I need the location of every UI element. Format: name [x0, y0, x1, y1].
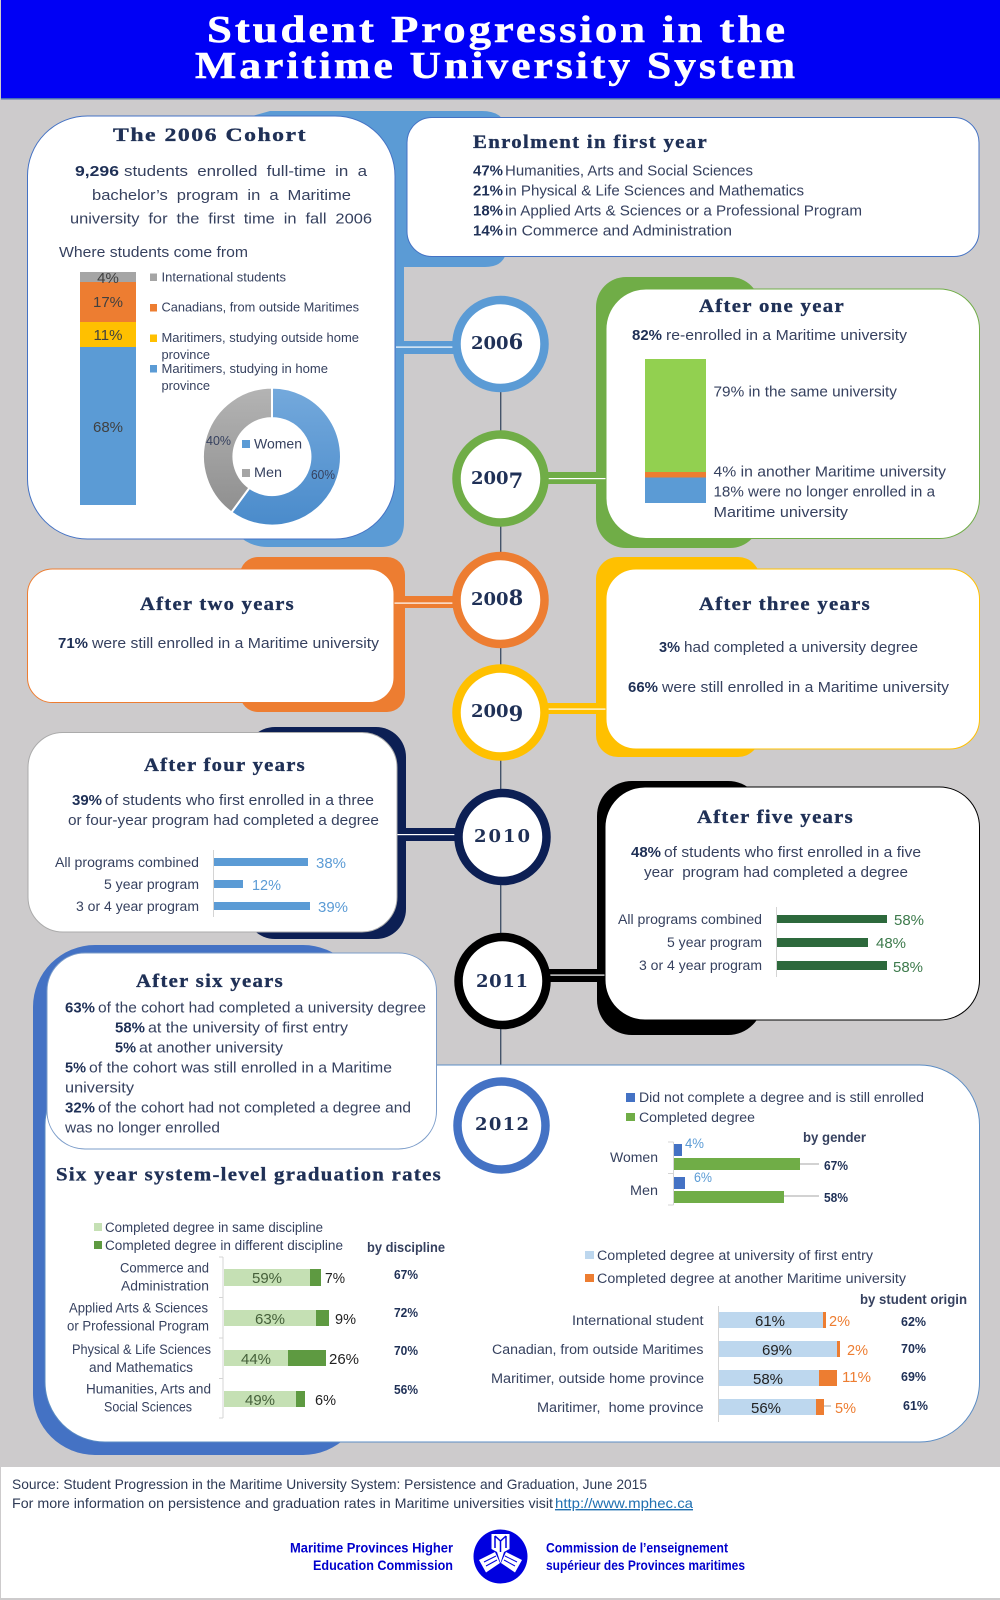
legend: origin: province — [162, 347, 210, 362]
legend: origin: Maritimers, studying outside home — [162, 330, 359, 345]
text block: enrolment list: 14% — [473, 222, 503, 240]
chart: by student origin: Maritimer, outside home province — [491, 1371, 704, 1386]
chart: by discipline: or Professional Program — [67, 1319, 209, 1334]
chart: by student origin: 5% — [835, 1400, 856, 1417]
donut chart: gender: 60% — [311, 467, 335, 482]
chart: by discipline: 7% — [325, 1270, 345, 1287]
chart: by student origin: Completed degree at university of first entry — [597, 1248, 873, 1263]
chart: by discipline — [67, 1220, 445, 1418]
chart: by student origin: International student — [572, 1313, 704, 1328]
bar chart: four year rates: 39% — [318, 899, 348, 916]
text block: enrolment list: in Commerce and Administration — [505, 222, 732, 240]
timeline node: 2007: 200 — [471, 468, 509, 489]
text: re-enrolled: re-enrolled in a Maritime university — [666, 327, 908, 344]
bar chart: five year rates: All programs combined — [618, 912, 762, 927]
organisation name: French — [546, 1541, 745, 1573]
text block: six year results: was no longer enrolled — [64, 1120, 220, 1137]
text: bar labels: 18% were no longer enrolled in a — [714, 484, 936, 500]
timeline node: 2006 — [456, 300, 544, 388]
organisation name: French: Commission de l’enseignement — [546, 1541, 728, 1556]
chart: by gender: Did not complete a degree and is still enrolled — [639, 1090, 924, 1105]
text block: cohort description: students enrolled full-time in a — [124, 163, 368, 180]
chart: by discipline: 44% — [241, 1351, 271, 1368]
timeline node: 2012 — [458, 1082, 546, 1170]
timeline node: 2009: 200 — [471, 701, 509, 722]
bar chart: five year rates: 48% — [876, 935, 906, 952]
source text — [12, 1476, 693, 1511]
bar chart: four year rates: All programs combined — [55, 855, 199, 870]
heading: after one year: After one year — [699, 296, 845, 317]
icon: commission logo — [474, 1530, 528, 1584]
text block: six year results: at the university of first entry — [148, 1020, 349, 1037]
chart: by gender: Men — [630, 1183, 658, 1198]
timeline node: 2010: 2010 — [474, 826, 530, 847]
text: four year result — [68, 792, 379, 829]
stacked bar chart: origin: 11% — [94, 327, 122, 344]
panel: after five years — [543, 781, 980, 1035]
text: bar labels: 4% in another Maritime university — [714, 464, 947, 480]
text: four year result: or four-year program had completed a degree — [68, 812, 379, 829]
source text: http://www.mphec.ca — [555, 1495, 693, 1511]
chart: by discipline: Completed degree in same discipline — [105, 1220, 323, 1235]
chart: by discipline: 9% — [335, 1311, 356, 1328]
timeline node: 2011 — [458, 937, 546, 1025]
text: five year result: year program had completed a degree — [644, 864, 908, 881]
donut chart: gender: 40% — [206, 433, 231, 448]
connector: 2011 — [543, 969, 605, 982]
panel: after one year — [540, 277, 980, 548]
timeline node: 2009: 9 — [509, 701, 523, 726]
chart: by student origin: 11% — [842, 1369, 871, 1386]
timeline node: 2007: 7 — [509, 468, 523, 493]
chart: by discipline: Physical & Life Sciences — [72, 1342, 211, 1357]
text: three year results: had completed a university degree — [684, 639, 918, 656]
connector: 2006 — [396, 341, 462, 354]
text block: six year results: at another university — [139, 1040, 284, 1057]
chart: by discipline: 59% — [252, 1270, 282, 1287]
text block: six year results: 5% — [115, 1040, 136, 1057]
connector: 2009 — [540, 703, 606, 714]
chart: by discipline: 26% — [329, 1351, 359, 1368]
heading: six year graduation rates: Six year system-level graduation rates — [56, 1165, 442, 1186]
text: five year result: of students who first enrolled in a five — [664, 844, 921, 861]
chart: by discipline: 6% — [315, 1392, 336, 1409]
chart: by gender: 6% — [694, 1170, 712, 1185]
chart: by discipline: Humanities, Arts and — [86, 1381, 211, 1396]
bar chart: five year rates: 3 or 4 year program — [639, 958, 762, 973]
bar chart: four year rates — [55, 850, 348, 917]
subheading: where students come from: Where students come from — [59, 244, 248, 261]
chart: by student origin: Canadian, from outside Maritimes — [492, 1342, 704, 1357]
chart: by discipline: Completed degree in different discipline — [105, 1238, 343, 1253]
chart: by discipline: 49% — [245, 1392, 275, 1409]
text: bar labels: 79% in the same university — [714, 384, 897, 400]
timeline node: 2009 — [456, 668, 544, 756]
text: five year result — [631, 844, 921, 881]
chart: by gender — [610, 1090, 924, 1205]
chart: by gender: 67% — [824, 1158, 848, 1173]
text block: enrolment list: 47% — [473, 162, 503, 180]
footer — [1, 1467, 1000, 1598]
text: two year result: 71% — [58, 635, 88, 652]
chart: by gender: Completed degree — [639, 1110, 755, 1125]
panel: after three years — [540, 557, 980, 757]
panel: 2006 cohort and enrolment — [28, 111, 979, 547]
text block: enrolment list: Humanities, Arts and Social Sciences — [505, 162, 753, 180]
text: three year results: 66% — [628, 679, 658, 696]
panel backing: 2006 blue — [238, 111, 507, 547]
organisation name: French: supérieur des Provinces maritimes — [546, 1558, 745, 1573]
chart: by student origin: Maritimer, home province — [537, 1400, 704, 1415]
stacked bar chart: after one year — [645, 359, 706, 503]
chart: by student origin: Completed degree at another Maritime university — [597, 1271, 906, 1286]
bar chart: five year rates: 58% — [893, 959, 923, 976]
chart: by discipline: Commerce and — [120, 1261, 209, 1276]
text: re-enrolled: 82% — [632, 327, 662, 344]
text block: six year results: of the cohort had completed a university degree — [98, 1000, 426, 1017]
title: Student Progression in the — [207, 9, 788, 51]
bar chart: four year rates: 3 or 4 year program — [76, 899, 199, 914]
heading: enrolment: Enrolment in first year — [473, 132, 708, 153]
heading: after five years: After five years — [697, 807, 854, 828]
text block: six year results: 5% — [65, 1060, 86, 1077]
text block: six year results: of the cohort had not completed a degree and — [98, 1100, 411, 1117]
legend: origin: Canadians, from outside Maritimes — [162, 300, 359, 314]
panel: after six years — [47, 953, 436, 1149]
chart: by discipline: by discipline — [367, 1240, 445, 1255]
text: two year result: were still enrolled in a Maritime university — [91, 635, 380, 652]
timeline node: 2008: 2008 — [471, 585, 523, 610]
text block: enrolment list: in Physical & Life Sciences and Mathematics — [505, 182, 804, 200]
chart: by gender: Women — [610, 1150, 658, 1165]
chart: by gender: 4% — [685, 1136, 704, 1151]
chart: by discipline: 67% — [394, 1267, 418, 1282]
stacked bar chart: origin: 17% — [93, 294, 123, 311]
bar chart: four year rates: 12% — [252, 877, 281, 894]
chart: by student origin: 69% — [901, 1369, 926, 1384]
text: four year result: of students who first enrolled in a three — [105, 792, 374, 809]
chart: by student origin: 58% — [753, 1371, 783, 1388]
chart: by discipline: 72% — [394, 1305, 418, 1320]
bar chart: five year rates: 5 year program — [667, 935, 762, 950]
heading: after four years: After four years — [144, 755, 306, 776]
panel: the 2006 cohort — [28, 116, 395, 539]
text: three year results: were still enrolled in a Maritime university — [661, 679, 950, 696]
timeline vertical line — [500, 390, 501, 1080]
timeline node: 2010 — [458, 793, 546, 881]
legend: origin — [150, 270, 359, 393]
legend: origin: International students — [162, 270, 286, 284]
legend: origin: Maritimers, studying in home — [162, 361, 328, 376]
donut chart: gender — [203, 388, 341, 526]
title: Maritime University System — [195, 45, 798, 87]
connector: 2010 — [397, 828, 462, 841]
chart: by student origin: 56% — [751, 1400, 781, 1417]
panel: after six years and graduation rates — [33, 945, 980, 1455]
source text: Source: Student Progression in the Maritime University System: Persistence and Graduation, June 2015 — [12, 1476, 647, 1492]
text block: six year results: university — [65, 1080, 135, 1097]
chart: by discipline: 56% — [394, 1382, 418, 1397]
bar chart: five year rates: 58% — [894, 912, 924, 929]
text block: six year results: 32% — [65, 1100, 95, 1117]
stacked bar chart: origin: 4% — [97, 270, 119, 287]
stacked bar chart: origin — [80, 270, 136, 505]
donut chart: gender: Men — [254, 464, 282, 480]
timeline node: 2008 — [456, 556, 544, 644]
chart: by student origin: 2% — [829, 1313, 850, 1330]
chart: by discipline: and Mathematics — [89, 1360, 193, 1375]
text: bar labels — [714, 384, 947, 521]
chart: by discipline: Social Sciences — [104, 1399, 192, 1414]
chart: by student origin: 2% — [847, 1342, 868, 1359]
organisation name: English — [290, 1541, 454, 1573]
chart: by discipline: 70% — [394, 1343, 418, 1358]
heading: after six years: After six years — [136, 971, 284, 992]
chart: by student origin: 62% — [901, 1314, 926, 1329]
text: three year results: 3% — [659, 639, 680, 656]
text block: cohort description: university for the first time in fall 2006 — [70, 210, 372, 228]
chart: by discipline: Applied Arts & Sciences — [69, 1301, 208, 1316]
organisation name: English: Education Commission — [313, 1558, 453, 1573]
text block: six year results: of the cohort was still enrolled in a Maritime — [89, 1060, 392, 1077]
timeline node: 2007 — [456, 434, 544, 522]
legend: origin: province — [162, 378, 210, 393]
chart: by student origin: by student origin — [860, 1292, 967, 1307]
chart: by gender: 58% — [824, 1190, 848, 1205]
chart: by student origin: 61% — [903, 1398, 928, 1413]
chart: by student origin — [491, 1248, 967, 1422]
chart: by student origin: 70% — [901, 1341, 926, 1356]
text block: six year results: 58% — [115, 1020, 145, 1037]
source text: For more information on persistence and graduation rates in Maritime universities visit — [12, 1495, 553, 1511]
timeline node: 2006: 2006 — [471, 329, 523, 354]
donut chart: gender: Women — [254, 436, 302, 452]
text: bar labels: Maritime university — [714, 504, 849, 521]
text: five year result: 48% — [631, 844, 661, 861]
text block: enrolment list: in Applied Arts & Sciences or a Professional Program — [505, 202, 862, 220]
organisation name: English: Maritime Provinces Higher — [290, 1541, 454, 1556]
bar chart: four year rates: 5 year program — [104, 877, 199, 892]
title — [195, 9, 798, 87]
chart: by discipline: Administration — [121, 1279, 209, 1294]
stacked bar chart: origin: 68% — [93, 419, 123, 436]
text block: cohort description: 9,296 — [75, 163, 119, 180]
panel: after four years — [28, 727, 462, 939]
heading: after three years: After three years — [699, 594, 871, 615]
text block: cohort description — [70, 163, 372, 228]
chart: by gender: by gender — [803, 1130, 867, 1145]
text block: enrolment list: 21% — [473, 182, 503, 200]
panel: enrolment in first year — [407, 118, 979, 256]
header banner — [1, 0, 1000, 100]
text block: six year results: 63% — [65, 1000, 95, 1017]
text block: enrolment list — [473, 162, 862, 240]
connector: 2007 — [540, 472, 606, 484]
text: three year results — [628, 639, 950, 696]
timeline node: 2011: 2011 — [476, 971, 528, 992]
chart: by student origin: 69% — [762, 1342, 792, 1359]
chart: by student origin: 61% — [755, 1313, 785, 1330]
chart: by discipline: 63% — [255, 1311, 285, 1328]
panel: after two years — [28, 557, 460, 712]
heading: the 2006 cohort: The 2006 Cohort — [113, 125, 307, 146]
text block: enrolment list: 18% — [473, 202, 503, 220]
bar chart: five year rates — [618, 907, 924, 977]
connector: 2008 — [394, 596, 460, 608]
text block: cohort description: bachelor’s program in a Maritime — [92, 187, 351, 204]
timeline node: 2012: 2012 — [475, 1114, 529, 1135]
heading: after two years: After two years — [140, 594, 295, 615]
text block: six year results — [64, 1000, 426, 1137]
text: four year result: 39% — [72, 792, 102, 809]
bar chart: four year rates: 38% — [316, 855, 346, 872]
